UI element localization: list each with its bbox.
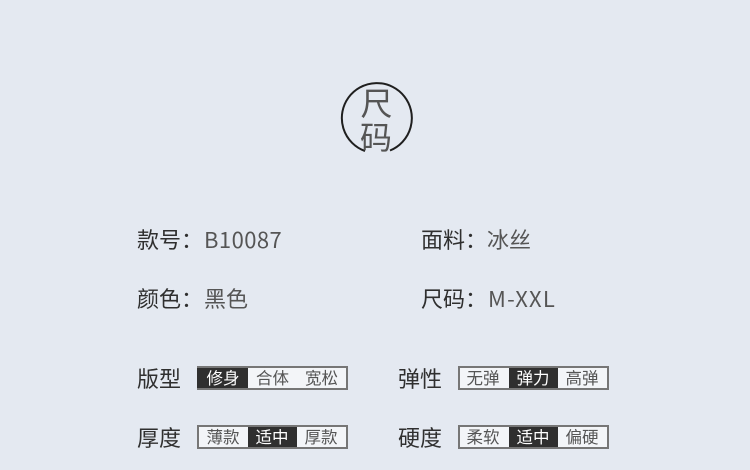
selector: thickness: 厚款 [304, 424, 338, 448]
text: B10087 [204, 223, 282, 255]
selector: thickness: 薄款 [206, 424, 240, 448]
spec: item number: 款号： [137, 223, 203, 255]
icon: size badge: 码 [360, 112, 392, 158]
selector: elasticity: 无弹 [466, 365, 500, 389]
selector: thickness [197, 425, 348, 449]
spec: item number [137, 223, 282, 255]
text: 冰丝 [487, 223, 531, 255]
selector: fit [197, 366, 348, 390]
spec: fabric: 面料： [421, 223, 487, 255]
selector: fit: 合体 [256, 365, 289, 389]
label: fit: 版型 [137, 362, 181, 394]
selector: fit: 修身 [206, 365, 240, 389]
text: 黑色 [204, 282, 248, 314]
spec: fabric [421, 223, 531, 255]
spec: size: 尺码： [421, 282, 487, 314]
selector: hardness [458, 425, 609, 449]
selector: fit: 宽松 [305, 365, 338, 389]
selector: elasticity [458, 366, 609, 390]
selector: hardness: 柔软 [466, 424, 500, 448]
text: M-XXL [488, 282, 556, 314]
icon: size badge: 尺 [360, 78, 393, 124]
label: hardness: 硬度 [398, 421, 442, 453]
selector: elasticity: 弹力 [516, 365, 550, 389]
selector: hardness: 适中 [516, 424, 550, 448]
icon: size badge [340, 78, 413, 158]
selector: elasticity: 高弹 [566, 365, 598, 389]
label: elasticity: 弹性 [398, 362, 442, 394]
spec: colour: 颜色： [137, 282, 203, 314]
selector: hardness: 偏硬 [566, 424, 598, 448]
selector: thickness: 适中 [256, 424, 288, 448]
label: thickness: 厚度 [137, 421, 181, 453]
spec: size [421, 282, 556, 314]
spec: colour [137, 282, 248, 314]
